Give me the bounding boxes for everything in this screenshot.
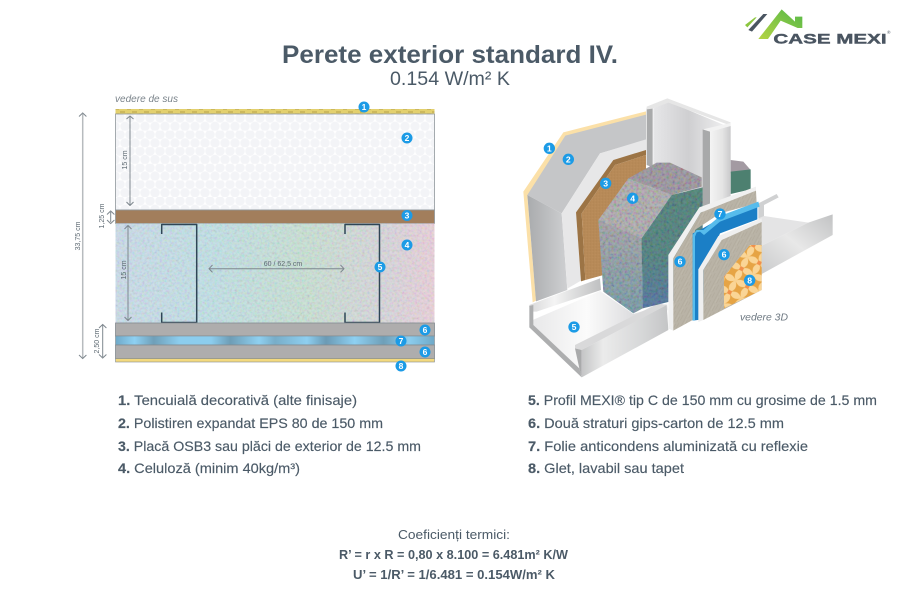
legend item 8: 8. Glet, lavabil sau tapet	[528, 460, 684, 476]
3D channel: front section	[529, 278, 668, 377]
legend item 4: 4. Celuloză (minim 40kg/m³)	[118, 460, 300, 476]
number markers: 5	[378, 262, 383, 272]
layer 2: EPS polystyrene	[116, 114, 434, 210]
icon: house roof	[745, 9, 802, 39]
label: vedere 3D: vedere 3D	[740, 313, 789, 324]
dimension: 15 cm EPS: 15 cm	[122, 150, 129, 170]
dimension: 1,25 cm	[99, 203, 114, 228]
3D number markers: 7	[718, 209, 723, 219]
legend item 6: 6. Două straturi gips-carton de 12.5 mm	[528, 415, 784, 431]
dimension: 15 cm cellulose: 15 cm	[121, 260, 128, 280]
legend: right column	[528, 392, 877, 476]
registered mark: ®	[887, 29, 891, 35]
subtitle: U value: 0.154 W/m² K	[390, 69, 510, 90]
layer 5: left C profile	[162, 224, 197, 322]
dimension: 2,50 cm: 2,50 cm	[94, 328, 101, 353]
dimension: 15 cm EPS	[122, 116, 134, 206]
number markers: 6	[423, 325, 428, 335]
dimension: 2,50 cm	[94, 324, 106, 358]
legend item 1: 1. Tencuială decorativă (alte finisaje)	[118, 392, 357, 408]
3D number markers: 8	[747, 275, 752, 285]
3D number markers: 6	[722, 250, 727, 260]
3D number markers: 6	[678, 257, 683, 267]
logo: Case Mexi	[745, 9, 891, 47]
title: Perete exterior standard IV.	[282, 41, 618, 69]
dimension: 60 / 62,5 cm	[209, 261, 344, 272]
layer 4: cellulose	[116, 224, 434, 323]
layer 6: gypsum board	[116, 345, 434, 358]
3D layer 8: wallpaper finish	[724, 245, 762, 308]
number markers: 7	[399, 336, 404, 346]
legend item 5: 5. Profil MEXI® tip C de 150 mm cu grosime de 1.5 mm	[528, 392, 877, 408]
dimension: 33,75 cm: 33,75 cm	[75, 221, 82, 250]
layer 5: right C profile	[345, 224, 380, 322]
3D layer 6: inner gypsum board	[698, 218, 762, 322]
coefficients heading: Coeficienți termici:	[398, 528, 510, 542]
legend item 2: 2. Polistiren expandat EPS 80 de 150 mm	[118, 415, 383, 431]
dimension: 33,75 cm	[75, 113, 86, 358]
formula R': R’ = r x R = 0,80 x 8.100 = 6.481m² K/W	[339, 548, 568, 562]
3D layer 5: vertical C profile	[647, 98, 731, 207]
legend item 3: 3. Placă OSB3 sau plăci de exterior de 12.5 mm	[118, 438, 421, 454]
3D number markers: 3	[603, 178, 608, 188]
logo wordmark: CASE MEXI	[773, 31, 887, 47]
3D layer 7: foil	[693, 202, 760, 321]
3D number markers: 1	[547, 143, 552, 153]
thermal coefficients	[339, 528, 568, 582]
layer 8: finish	[116, 358, 434, 362]
legend: left column	[118, 392, 421, 476]
layer 1: decorative plaster	[116, 109, 434, 114]
number markers: 2	[405, 133, 410, 143]
number markers	[358, 102, 430, 372]
label: vedere de sus: vedere de sus	[115, 93, 179, 105]
3D layer 3: OSB	[576, 150, 646, 281]
3D number markers	[544, 143, 755, 333]
legend item 7: 7. Folie anticondens aluminizată cu reflexie	[528, 438, 808, 454]
dimension: 60 / 62,5 cm: 60 / 62,5 cm	[264, 261, 302, 268]
number markers: 4	[405, 240, 410, 250]
panel: 3D wall section	[523, 98, 833, 377]
3D layer 1: plaster edge	[523, 111, 646, 302]
3D channel: right section	[758, 194, 833, 274]
3D layer 2: polystyrene	[527, 115, 646, 301]
number markers: 3	[405, 210, 410, 220]
3D back block	[731, 160, 751, 194]
3D number markers: 2	[566, 154, 571, 164]
3D layer 4: cellulose block	[595, 162, 703, 317]
number markers: 1	[362, 102, 367, 112]
layer 7: vapour foil	[116, 336, 434, 345]
layer 3: OSB board	[116, 210, 434, 224]
number markers: 6	[423, 347, 428, 357]
3D number markers: 5	[572, 322, 577, 332]
formula U': U’ = 1/R’ = 1/6.481 = 0.154W/m² K	[353, 568, 555, 582]
dimension: 1,25 cm: 1,25 cm	[99, 203, 106, 228]
3D layer 6: outer gypsum board	[668, 187, 757, 331]
dimension: 15 cm cellulose	[121, 226, 132, 320]
layer 6: gypsum board	[116, 323, 434, 336]
3D number markers: 4	[630, 193, 635, 203]
panel: top view cross-section	[75, 93, 434, 372]
number markers: 8	[399, 361, 404, 371]
